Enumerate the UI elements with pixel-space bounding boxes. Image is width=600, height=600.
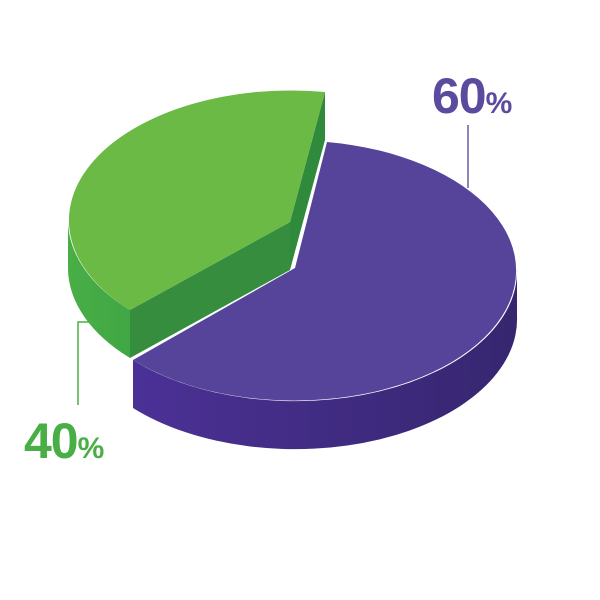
label: 60%: 60% xyxy=(432,68,512,124)
label: 60% xyxy=(432,68,512,188)
label: 40%: 40% xyxy=(24,413,104,469)
label: 40% xyxy=(24,322,104,469)
slice: purple 60% xyxy=(133,142,517,449)
slice: green 40% xyxy=(68,90,325,358)
